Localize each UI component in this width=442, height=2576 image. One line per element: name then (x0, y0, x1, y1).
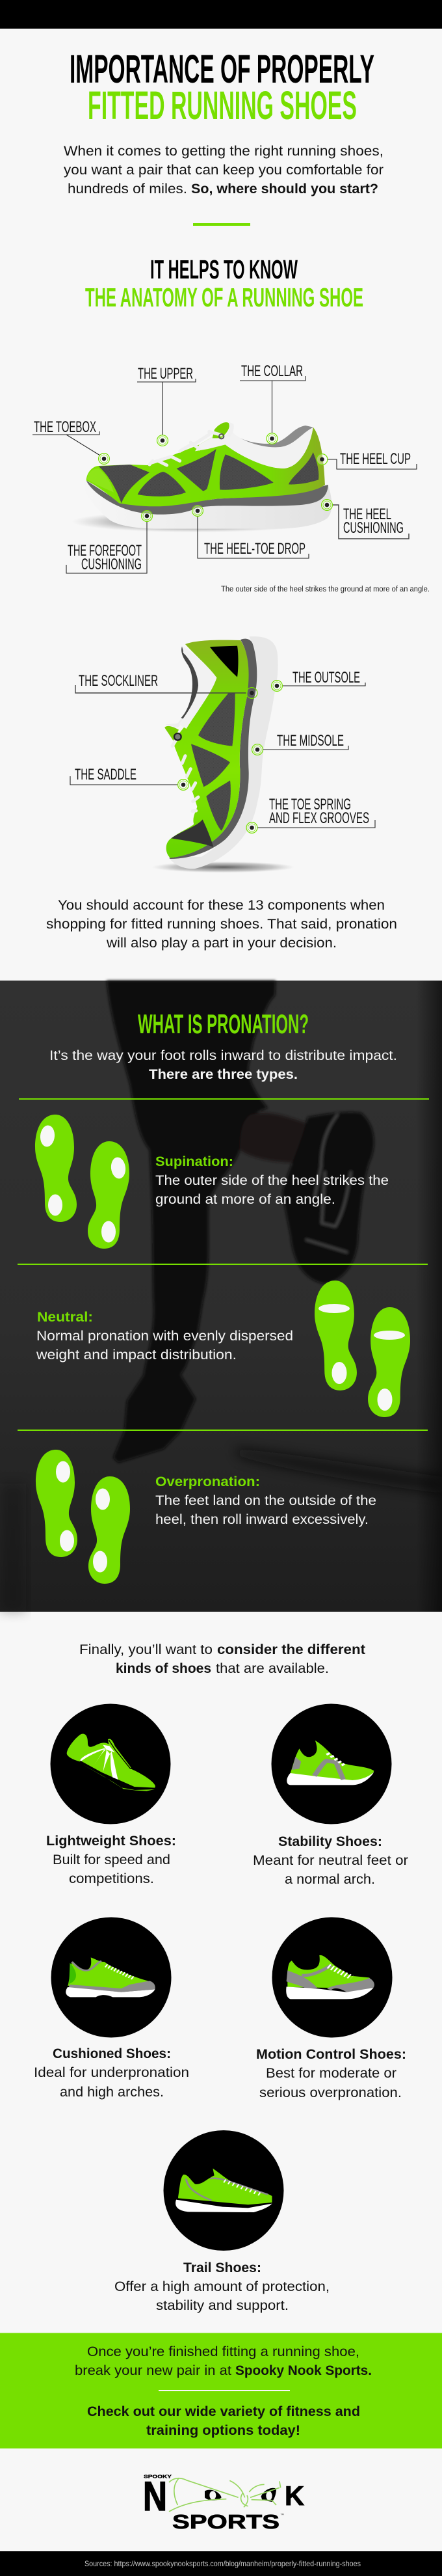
logo: Spooky Nook Sports: K (285, 2480, 304, 2511)
panel: green call to action: Spooky Nook Sports. (235, 2363, 372, 2378)
callout: the collar (240, 362, 306, 444)
panel: green call to action: training options today! (146, 2423, 300, 2438)
small caption: The outer side of the heel strikes the ground at more of an angle. (221, 586, 430, 593)
supination text: ground at more of an angle. (155, 1192, 335, 1207)
components text: You should account for these 13 components when (58, 898, 385, 913)
pronation intro text: There are three types. (149, 1067, 298, 1082)
callout: the forefoot cushioning (66, 511, 152, 573)
components text: shopping for fitted running shoes. That said, pronation (46, 917, 397, 932)
trail shoes text: Offer a high amount of protection, (114, 2279, 330, 2294)
callout: the sockliner: THE SOCKLINER (79, 672, 158, 690)
icon: overpronation feet (36, 1450, 130, 1584)
callout: the upper: THE UPPER (138, 365, 193, 383)
callout: the heel cushioning (322, 500, 409, 539)
callout: the forefoot cushioning: CUSHIONING (81, 556, 142, 573)
top view shoe illustration (151, 636, 294, 873)
logo: Spooky Nook Sports: ™ (280, 2513, 284, 2517)
icon: lightweight shoe circle (51, 1703, 170, 1824)
callout: the heel cup (317, 450, 417, 469)
stability shoes text: Stability Shoes: (278, 1834, 382, 1849)
logo: Spooky Nook Sports: N (143, 2474, 167, 2519)
lightweight shoes text: competitions. (69, 1871, 154, 1886)
trail shoes text: Trail Shoes: (183, 2260, 261, 2275)
supination text (155, 1154, 389, 1207)
shoe kinds intro: consider the different (217, 1642, 365, 1657)
supination text: The outer side of the heel strikes the (155, 1173, 389, 1188)
trail shoes text: stability and support. (156, 2298, 289, 2313)
shoe kinds intro: that are available. (216, 1661, 329, 1676)
icon: stability shoe circle (272, 1703, 391, 1824)
pronation intro text: It’s the way your foot rolls inward to distribute impact. (49, 1048, 397, 1063)
anatomy heading (85, 254, 363, 312)
overpronation text: The feet land on the outside of the (155, 1493, 376, 1508)
title (70, 47, 374, 128)
footer bar with sources: Sources: https://www.spookynooksports.com/blog/manheim/properly-fitted-running-shoes (84, 2559, 361, 2568)
intro text (64, 144, 384, 197)
callout: the collar: THE COLLAR (241, 362, 303, 380)
callout: the toe spring and flex grooves: THE TOE SPRING (269, 796, 351, 813)
panel: green call to action: break your new pair in at (75, 2363, 231, 2378)
callout: the heel-toe drop (192, 506, 309, 558)
callout: the saddle: THE SADDLE (75, 766, 136, 783)
panel: green call to action: Check out our wide variety of fitness and (87, 2404, 360, 2419)
motion control shoes text: serious overpronation. (259, 2085, 402, 2100)
intro text: When it comes to getting the right running shoes, (64, 144, 384, 159)
callout: the heel-toe drop: THE HEEL-TOE DROP (204, 540, 306, 558)
callout: the midsole (252, 732, 348, 755)
icon: trail shoe circle (164, 2130, 283, 2251)
pronation intro text (49, 1048, 397, 1082)
callout: the midsole: THE MIDSOLE (277, 732, 344, 750)
side view shoe illustration (72, 422, 332, 532)
lightweight shoes text (46, 1834, 176, 1886)
callout: the outsole: THE OUTSOLE (292, 669, 360, 686)
logo: Spooky Nook Sports: SPOOKY (144, 2475, 172, 2479)
neutral text: Neutral: (37, 1310, 93, 1325)
stability shoes text (253, 1834, 408, 1887)
cushioned shoes text: and high arches. (60, 2085, 164, 2100)
overpronation text: Overpronation: (155, 1474, 260, 1489)
intro text: you want a pair that can keep you comfortable for (64, 163, 384, 178)
intro text: hundreds of miles. (68, 182, 187, 197)
cushioned shoes text: Ideal for underpronation (34, 2065, 189, 2080)
callout: the heel cushioning: CUSHIONING (343, 519, 404, 537)
logo: Spooky Nook Sports: SPORTS (172, 2510, 280, 2533)
shoe kinds intro (79, 1642, 365, 1676)
pronation heading: WHAT IS PRONATION? (138, 1009, 309, 1039)
trail shoes text (114, 2260, 330, 2313)
icon: motion control shoe circle (272, 1917, 393, 2038)
motion control shoes text: Motion Control Shoes: (256, 2047, 406, 2062)
panel: green call to action: Once you’re finished fitting a running shoe, (87, 2344, 359, 2359)
callout: the toebox (32, 418, 109, 464)
top black bar (0, 0, 442, 29)
motion control shoes text (256, 2047, 406, 2100)
motion control shoes text: Best for moderate or (266, 2066, 396, 2081)
neutral text: weight and impact distribution. (36, 1348, 237, 1363)
icon: supination feet (35, 1115, 129, 1249)
overpronation text: heel, then roll inward excessively. (155, 1512, 369, 1527)
components text: will also play a part in your decision. (106, 936, 337, 951)
icon: cushioned shoe circle (51, 1917, 172, 2038)
shoe kinds intro: Finally, you’ll want to (79, 1642, 213, 1657)
callout: the forefoot cushioning: THE FOREFOOT (68, 542, 142, 560)
intro text: So, where should you start? (191, 182, 378, 197)
anatomy heading: IT HELPS TO KNOW (150, 254, 298, 284)
icon: neutral feet (315, 1281, 410, 1417)
stability shoes text: Meant for neutral feet or (253, 1853, 408, 1868)
neutral text: Normal pronation with evenly dispersed (36, 1329, 293, 1344)
lightweight shoes text: Lightweight Shoes: (46, 1834, 176, 1849)
callout: the upper (137, 365, 196, 446)
callout: the toe spring and flex grooves (246, 796, 375, 833)
overpronation text (155, 1474, 376, 1527)
cushioned shoes text: Cushioned Shoes: (53, 2046, 171, 2061)
lightweight shoes text: Built for speed and (53, 1852, 170, 1867)
panel: green call to action (0, 2333, 442, 2448)
footer bar with sources (0, 2551, 442, 2576)
cushioned shoes text (34, 2046, 189, 2100)
shoe kinds intro: kinds of shoes (116, 1661, 211, 1676)
callout: the saddle (70, 766, 188, 790)
neutral text (36, 1310, 293, 1363)
logo: Spooky Nook Sports (143, 2474, 304, 2533)
callout: the toebox: THE TOEBOX (34, 418, 96, 436)
stability shoes text: a normal arch. (285, 1872, 375, 1887)
callout: the toe spring and flex grooves: AND FLEX GROOVES (269, 809, 369, 827)
callout: the heel cushioning: THE HEEL (343, 506, 391, 523)
callout: the outsole (272, 669, 365, 691)
components text (46, 898, 397, 951)
callout: the sockliner (75, 672, 257, 698)
supination text: Supination: (155, 1154, 233, 1169)
panel: pronation dark photo background (0, 981, 442, 1612)
